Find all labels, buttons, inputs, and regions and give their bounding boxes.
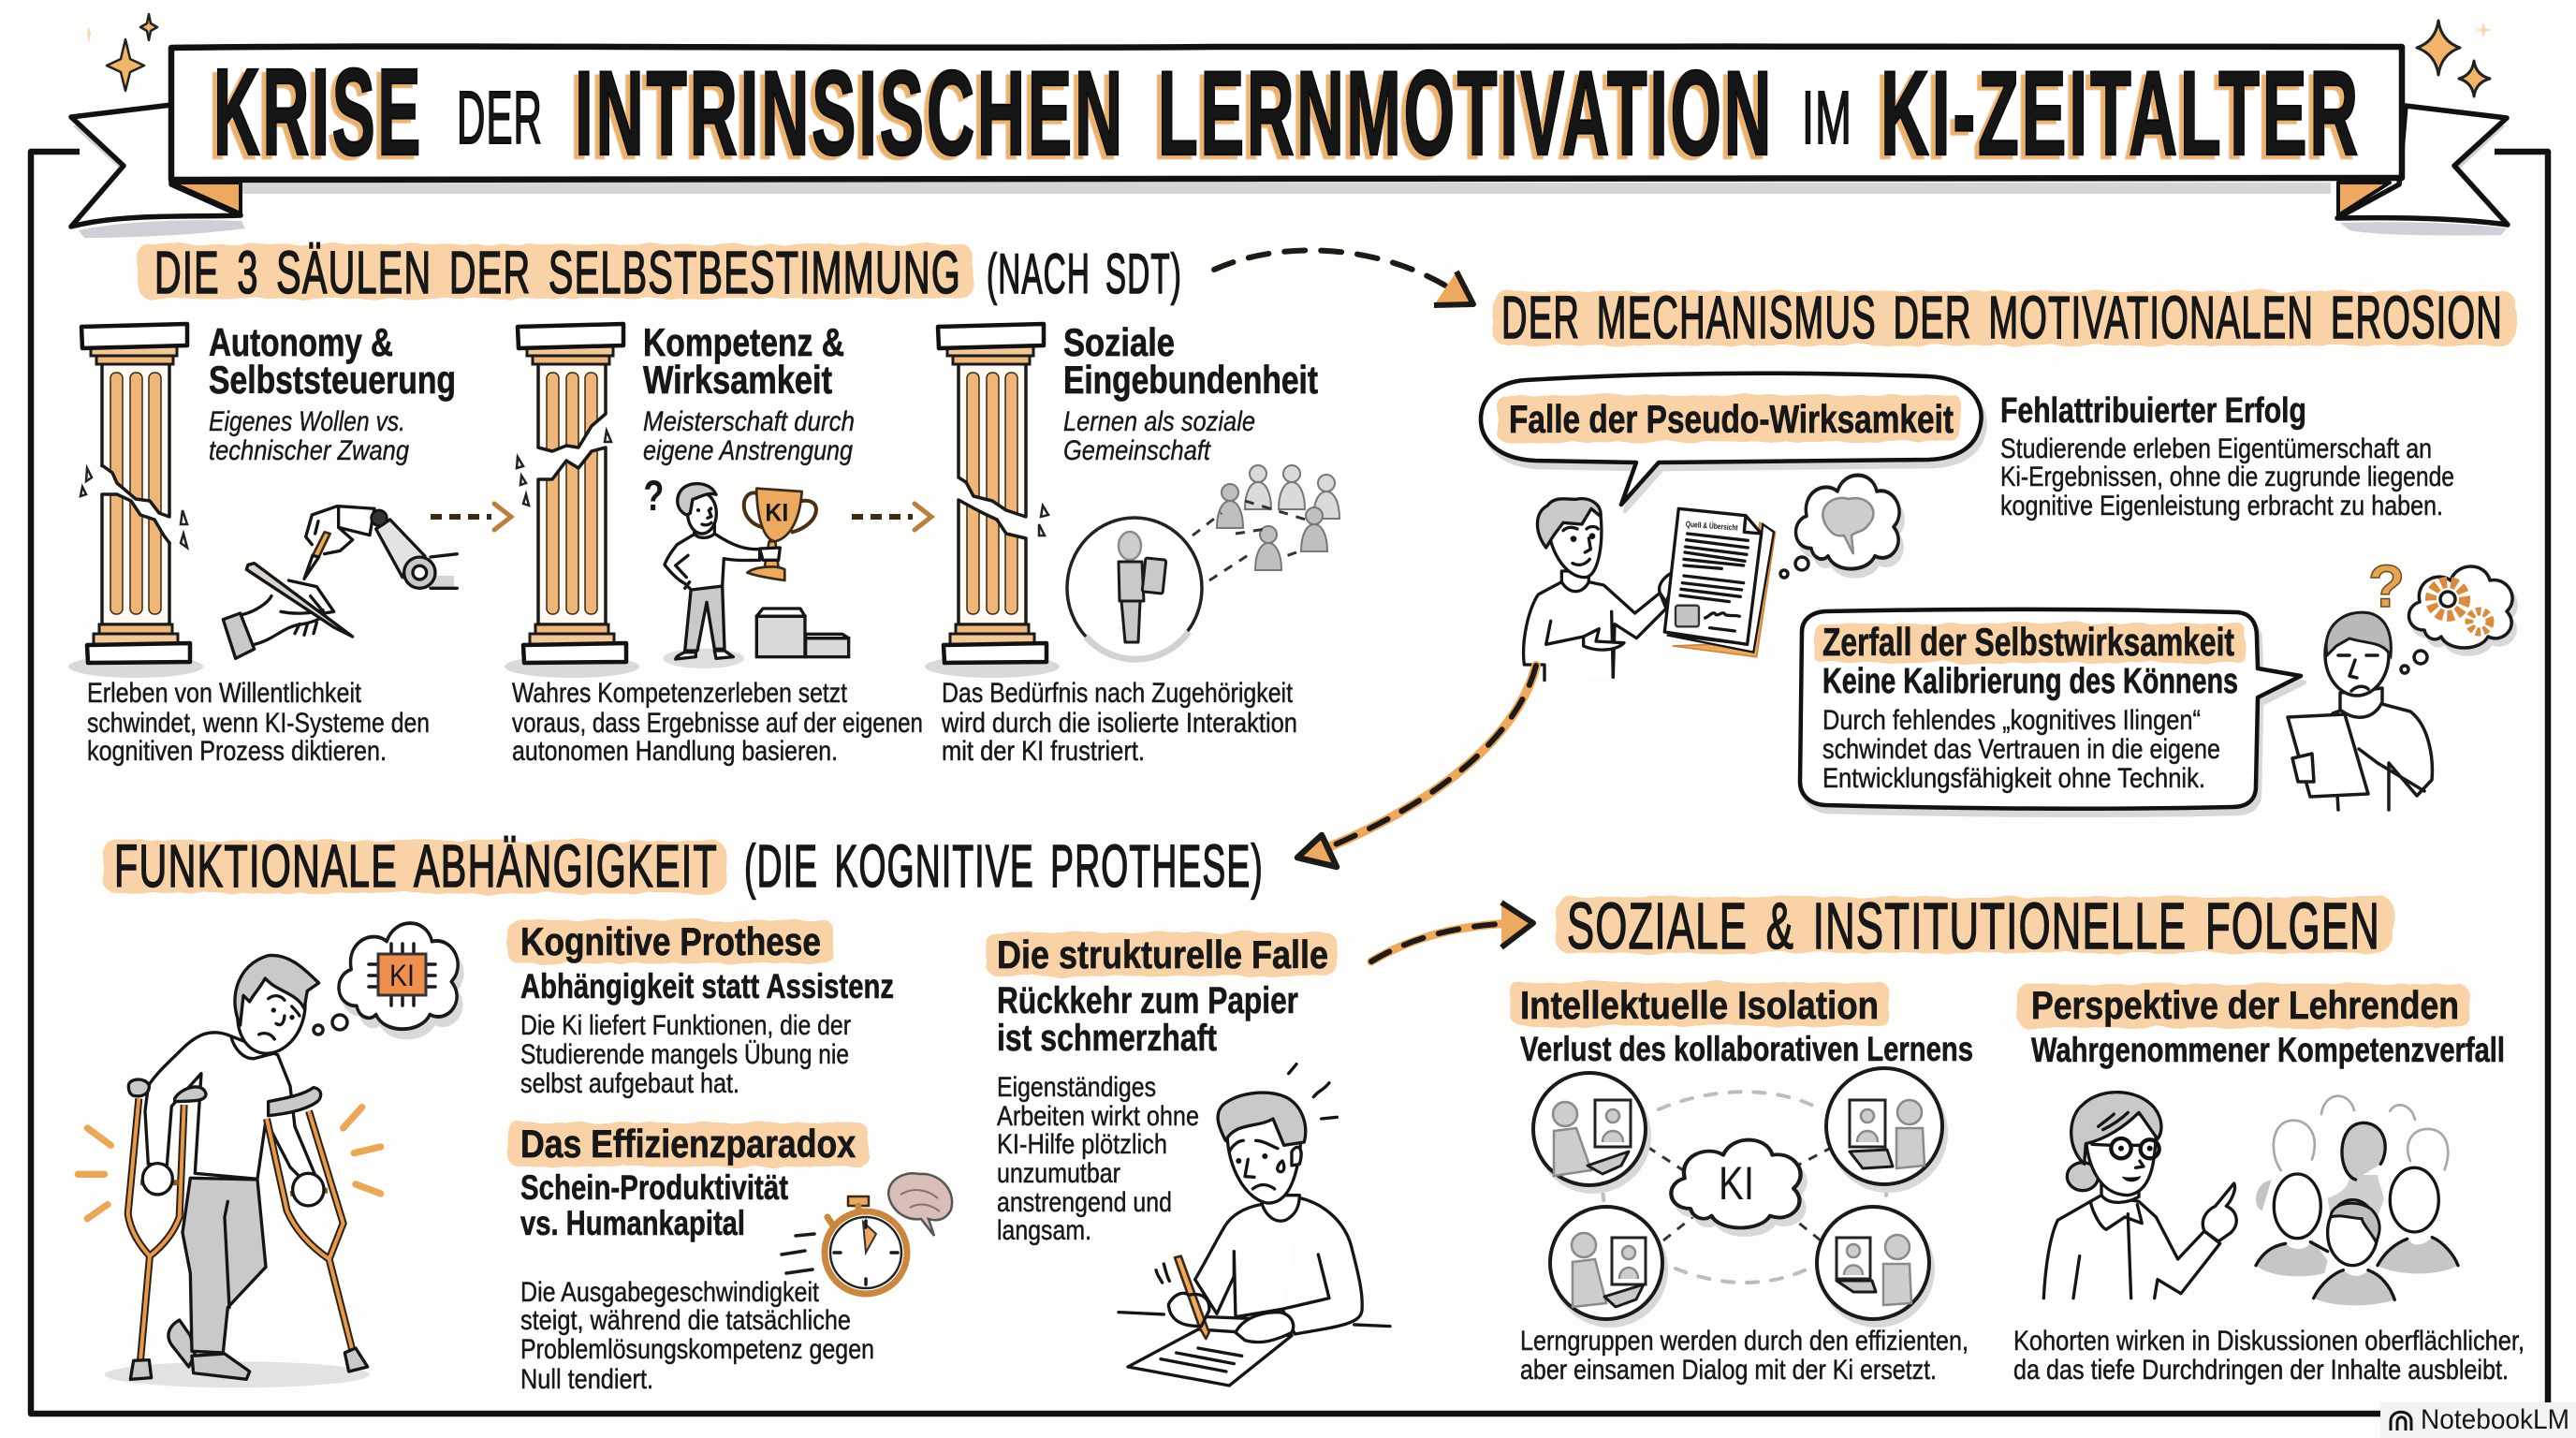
text: Perspektive der Lehrenden bbox=[2017, 983, 2505, 1069]
text block: Die strukturelle Falle: Die strukturelle Falle bbox=[997, 932, 1328, 976]
panel: mechanism of motivational erosion bbox=[1481, 284, 2516, 810]
arrow: pillar 2 to 3 bbox=[852, 504, 931, 530]
icon: doubtful student with paper bbox=[2288, 552, 2432, 810]
pillar 2 text bbox=[512, 678, 923, 767]
text block: Die strukturelle Falle: Eigenständiges bbox=[997, 1072, 1156, 1103]
pillar 3 text: mit der KI frustriert. bbox=[942, 736, 1145, 767]
callout: Zerfall der Selbstwirksamkeit: Entwicklungsfähigkeit ohne Technik. bbox=[1822, 763, 2205, 794]
text: Lerngruppen: Lerngruppen werden durch den effizienten, bbox=[1520, 1326, 1969, 1357]
badge: NotebookLM bbox=[2380, 1402, 2576, 1438]
text block: Das Effizienzparadox: Das Effizienzparadox bbox=[520, 1122, 856, 1166]
title text: INTRINSISCHEN bbox=[575, 47, 1125, 181]
icon: sparkles left bbox=[87, 14, 157, 91]
callout: Zerfall der Selbstwirksamkeit: Keine Kalibrierung des Könnens bbox=[1822, 662, 2238, 701]
node: learner top right bbox=[1826, 1068, 1942, 1184]
speech bubble: Falle der Pseudo-Wirksamkeit bbox=[1481, 374, 1982, 505]
pillar 1 title: Eigenes Wollen vs. bbox=[209, 406, 405, 437]
arrow: pillar 1 to 2 bbox=[431, 504, 511, 530]
pillar 1: autonomy bbox=[68, 324, 203, 678]
icon: students cohort bbox=[2256, 1096, 2458, 1305]
heading: Die 3 Säulen: (NACH SDT) bbox=[987, 242, 1182, 305]
icon: person holding KI trophy: KI bbox=[765, 499, 788, 527]
text block: Das Effizienzparadox: Problemlösungskompetenz gegen bbox=[520, 1334, 874, 1365]
text: Fehlattribuierter Erfolg: kognitive Eigenleistung erbracht zu haben. bbox=[2000, 491, 2443, 521]
icon: sparkles right bbox=[2417, 21, 2491, 96]
text block: Kognitive Prothese: Kognitive Prothese bbox=[520, 919, 821, 963]
pillar 3 text: wird durch die isolierte Interaktion bbox=[941, 708, 1297, 739]
text: Intellektuelle Isolation: Intellektuelle Isolation bbox=[1520, 983, 1879, 1027]
text: Fehlattribuierter Erfolg: Studierende erleben Eigentümerschaft an bbox=[2000, 433, 2432, 464]
icon: thought cloud with KI chip bbox=[314, 923, 458, 1034]
text block: Das Effizienzparadox: Schein-Produktivität bbox=[520, 1168, 788, 1207]
title text bbox=[213, 43, 2361, 181]
icon: thought cloud with brain bbox=[1780, 476, 1899, 578]
heading: Funktionale Abhängigkeit: FUNKTIONALE ABHÄNGIGKEIT bbox=[114, 832, 718, 900]
text block: Das Effizienzparadox: steigt, während die tatsächliche bbox=[520, 1305, 851, 1336]
pillar 3 text: Das Bedürfnis nach Zugehörigkeit bbox=[942, 678, 1294, 709]
diagram: learners isolated around KI cloud bbox=[1533, 1068, 1942, 1319]
text block: Kognitive Prothese: selbst aufgebaut hat. bbox=[520, 1068, 739, 1099]
icon: doubtful student with paper: ? bbox=[2368, 552, 2405, 620]
text block: Die strukturelle Falle: Arbeiten wirkt ohne bbox=[997, 1101, 1199, 1132]
panel: social and institutional consequences bbox=[1511, 889, 2525, 1386]
pillar 2 text: autonomen Handlung basieren. bbox=[512, 736, 838, 767]
title text: KRISE bbox=[213, 43, 423, 181]
arrow: dependency to consequences bbox=[1371, 902, 1533, 961]
pillar 3 title: Soziale bbox=[1063, 320, 1175, 364]
icon: podium bbox=[756, 609, 849, 657]
pillar 2 title: Meisterschaft durch bbox=[643, 406, 855, 437]
text block: Kognitive Prothese: Die Ki liefert Funktionen, die der bbox=[520, 1010, 851, 1041]
pillar 3 title: Gemeinschaft bbox=[1063, 435, 1211, 466]
title text: DER bbox=[457, 76, 543, 159]
icon: man on crutches bbox=[78, 955, 381, 1387]
text: Lerngruppen: aber einsamen Dialog mit der Ki ersetzt. bbox=[1520, 1355, 1937, 1386]
callout: Zerfall der Selbstwirksamkeit: Durch fehlendes „kognitives Ilingen“ bbox=[1822, 705, 2201, 736]
pillar 1 text: kognitiven Prozess diktieren. bbox=[87, 736, 387, 767]
panel: three pillars of self-determination bbox=[68, 239, 1339, 767]
icon: teacher pointing bbox=[2043, 1093, 2236, 1299]
node: KI cloud bbox=[1671, 1140, 1801, 1228]
text: Fehlattribuierter Erfolg: Fehlattribuierter Erfolg bbox=[2000, 391, 2306, 431]
text block: Die strukturelle Falle: anstrengend und bbox=[997, 1187, 1172, 1218]
pillar 1 title: technischer Zwang bbox=[209, 435, 409, 466]
text block: Die strukturelle Falle: langsam. bbox=[997, 1215, 1091, 1246]
icon: stressed student writing bbox=[1119, 1064, 1390, 1386]
pillar 2 text: Wahres Kompetenzerleben setzt bbox=[512, 678, 848, 709]
text block: Die strukturelle Falle bbox=[987, 932, 1337, 1246]
text block: Die strukturelle Falle: ist schmerzhaft bbox=[997, 1018, 1217, 1059]
icon: isolated person in bubble with tablet bbox=[1067, 518, 1202, 659]
pillar 1 title: Autonomy & bbox=[209, 320, 393, 364]
arrow: mechanism to dependency bbox=[1297, 666, 1536, 867]
pillar 3 title: Lernen als soziale bbox=[1063, 406, 1255, 437]
node: learner bottom left bbox=[1550, 1207, 1662, 1319]
text block: Kognitive Prothese: Studierende mangels Übung nie bbox=[520, 1039, 849, 1070]
pillar 2 title bbox=[643, 320, 855, 466]
text: Intellektuelle Isolation bbox=[1511, 982, 1973, 1068]
icon: thought cloud with gears bbox=[2401, 566, 2512, 673]
text block: Die strukturelle Falle: Rückkehr zum Papier bbox=[997, 980, 1298, 1021]
speech bubble: Falle der Pseudo-Wirksamkeit: Falle der Pseudo-Wirksamkeit bbox=[1509, 397, 1954, 441]
text: Perspektive der Lehrenden: Perspektive der Lehrenden bbox=[2031, 983, 2459, 1027]
heading: Funktionale Abhängigkeit: (DIE KOGNITIVE PROTHESE) bbox=[744, 832, 1264, 900]
pillar 1 title bbox=[209, 320, 456, 466]
pillar 2: competence bbox=[505, 324, 639, 678]
arrow: pillars to mechanism bbox=[1214, 250, 1473, 305]
title text: IM bbox=[1802, 76, 1852, 159]
pillar 1 text: schwindet, wenn KI-Systeme den bbox=[87, 708, 430, 739]
pillar 3 title: Eingebundenheit bbox=[1063, 358, 1318, 402]
text block: Die strukturelle Falle: unzumutbar bbox=[997, 1158, 1120, 1189]
text block: Das Effizienzparadox bbox=[507, 1122, 874, 1395]
heading: Die 3 Säulen: DIE 3 SÄULEN DER SELBSTBESTIMMUNG bbox=[154, 239, 961, 306]
callout: Zerfall der Selbstwirksamkeit: Zerfall der Selbstwirksamkeit bbox=[1822, 620, 2234, 664]
icon: stopwatch and brain bbox=[782, 1173, 952, 1294]
title banner bbox=[71, 43, 2508, 238]
icon: student showing paper bbox=[1524, 499, 1776, 681]
pillar 2 title: Wirksamkeit bbox=[643, 358, 832, 402]
panel: functional dependency bbox=[78, 832, 1390, 1395]
pillar 1 text bbox=[87, 678, 430, 767]
pillar 3 text bbox=[941, 678, 1297, 767]
pillar 3: relatedness bbox=[925, 324, 1060, 678]
text block: Kognitive Prothese: Abhängigkeit statt Assistenz bbox=[520, 967, 894, 1005]
text: Intellektuelle Isolation: Verlust des kollaborativen Lernens bbox=[1520, 1030, 1973, 1068]
node: learner top left bbox=[1533, 1073, 1646, 1185]
pillar 2 title: Kompetenz & bbox=[643, 320, 844, 364]
icon: person holding KI trophy: ? bbox=[643, 472, 664, 520]
icon: person holding KI trophy bbox=[643, 472, 816, 668]
text: Kohorten bbox=[2013, 1326, 2525, 1386]
icon: thought cloud with KI chip: KI bbox=[389, 959, 415, 992]
node: KI cloud: KI bbox=[1719, 1157, 1754, 1210]
text block: Das Effizienzparadox: Null tendiert. bbox=[520, 1364, 653, 1395]
text block: Kognitive Prothese bbox=[507, 919, 894, 1099]
callout: Zerfall der Selbstwirksamkeit: schwindet das Vertrauen in die eigene bbox=[1822, 734, 2220, 765]
text: Fehlattribuierter Erfolg: Ki-Ergebnissen, ohne die zugrunde liegende bbox=[2000, 462, 2454, 492]
icon: robot arm guiding a hand with pen bbox=[223, 506, 457, 658]
pillar 2 text: voraus, dass Ergebnisse auf der eigenen bbox=[512, 708, 923, 739]
text block: Das Effizienzparadox: vs. Humankapital bbox=[520, 1204, 745, 1242]
text block: Das Effizienzparadox: Die Ausgabegeschwindigkeit bbox=[520, 1277, 820, 1308]
icon: student showing paper: Quell & Übersicht bbox=[1686, 520, 1738, 533]
node: learner bottom right bbox=[1817, 1207, 1929, 1319]
pillar 3 title bbox=[1063, 320, 1318, 466]
text block: Die strukturelle Falle: KI-Hilfe plötzlich bbox=[997, 1129, 1167, 1160]
callout: Zerfall der Selbstwirksamkeit bbox=[1800, 609, 2301, 809]
pillar 1 text: Erleben von Willentlichkeit bbox=[87, 678, 362, 709]
text: Lerngruppen bbox=[1520, 1326, 1969, 1386]
badge: NotebookLM: NotebookLM bbox=[2421, 1404, 2569, 1435]
title text: LERNMOTIVATION bbox=[1158, 47, 1774, 181]
pillar 1 title: Selbststeuerung bbox=[209, 358, 456, 402]
icon: distant group of people bbox=[1193, 465, 1339, 580]
pillar 2 title: eigene Anstrengung bbox=[643, 435, 853, 466]
text: Fehlattribuierter Erfolg bbox=[2000, 391, 2454, 521]
